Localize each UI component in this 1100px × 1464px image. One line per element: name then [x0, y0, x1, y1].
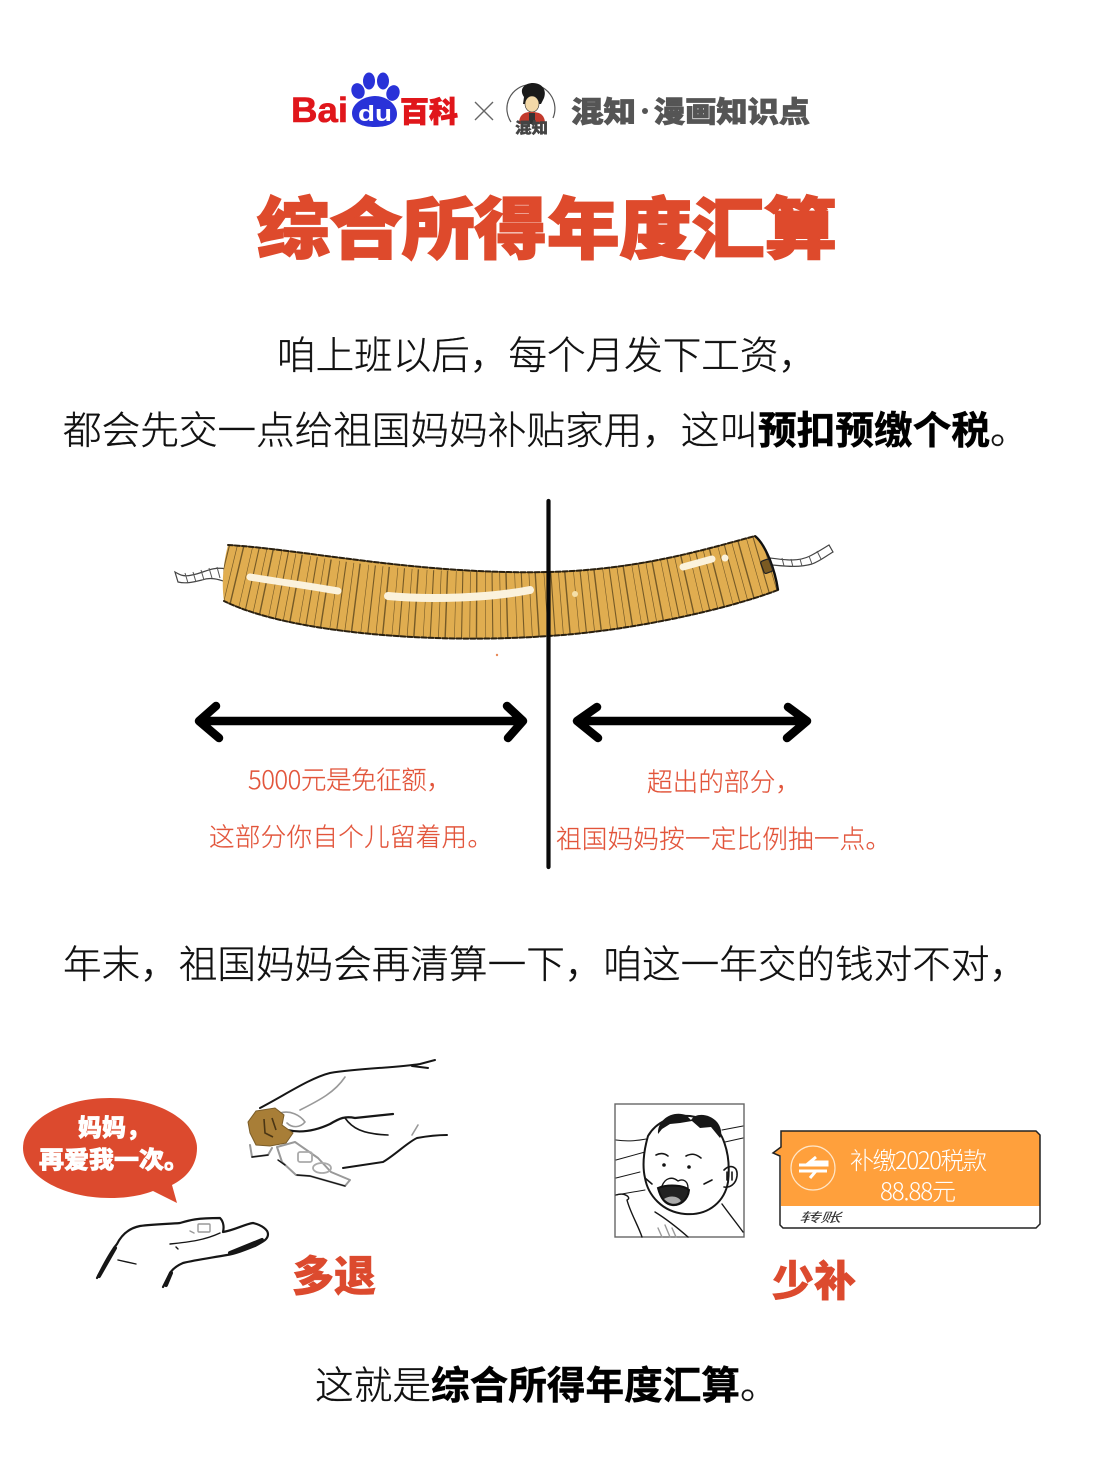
conclusion text: 这就是: [315, 1365, 431, 1408]
intro text: 预扣预缴个税: [758, 410, 990, 453]
coin ribs: [222, 559, 780, 606]
caption: tax-free amount: [209, 760, 493, 854]
coin highlights: [250, 556, 728, 598]
conclusion text: [315, 1365, 779, 1408]
illustration: receiving hand: [97, 1218, 268, 1287]
speech bubble: 再爱我一次。: [39, 1147, 189, 1174]
logo text: Hunzhi comics: 漫画知识点: [654, 96, 810, 129]
header logos: [291, 72, 810, 137]
logo text: Hunzhi comics: 混知: [571, 96, 636, 129]
icon: transfer arrows: [791, 1146, 835, 1190]
intro text: 都会先交一点给祖国妈妈补贴家用，这叫: [63, 410, 758, 453]
logo: Hunzhi avatar: 混知: [515, 119, 548, 137]
intro text: 咱上班以后，每个月发下工资，: [277, 335, 817, 378]
caption: exceeding amount: [556, 762, 891, 856]
divider line: [546, 501, 551, 867]
caption: tax-free amount: 这部分你自个儿留着用。: [209, 817, 493, 854]
caption: exceeding amount: 祖国妈妈按一定比例抽一点。: [556, 819, 891, 856]
illustration: crying baby: [615, 1104, 744, 1237]
title: 综合所得年度汇算: [257, 193, 837, 268]
logo: Baidu Baike: du: [358, 101, 392, 126]
year-end text: 年末，祖国妈妈会再清算一下，咱这一年交的钱对不对，: [63, 944, 1028, 987]
rope right: [770, 545, 833, 567]
coin outline: [224, 536, 778, 639]
caption: tax-free amount: 5000元是免征额，: [248, 760, 452, 797]
tax payment card: 补缴2020税款: [850, 1141, 987, 1176]
logo: Hunzhi avatar: [507, 83, 555, 137]
arrow: taxable range: [577, 707, 807, 738]
speech bubble: 妈妈，: [78, 1114, 150, 1142]
tax payment card: 88.88元: [880, 1172, 956, 1207]
rope left: [175, 567, 226, 583]
intro text: [63, 335, 1029, 453]
conclusion text: 。: [740, 1365, 779, 1408]
logo: Baidu Baike: 百科: [400, 96, 458, 129]
coin in fingers: [248, 1108, 293, 1146]
illustration: hand giving coin: [248, 1060, 447, 1186]
caption: exceeding amount: 超出的部分，: [647, 762, 801, 799]
arrow: tax-free range: [199, 706, 523, 738]
logo: Baidu Baike: [291, 72, 458, 130]
tax payment card: [773, 1131, 1040, 1228]
logo text: Hunzhi comics: [571, 96, 810, 129]
label: pay less: 少补: [772, 1258, 856, 1305]
multiply sign: [475, 102, 493, 120]
tax payment card: 转账: [799, 1210, 844, 1225]
logo: Baidu Baike: Bai: [291, 91, 348, 130]
speech bubble: [23, 1098, 197, 1203]
illustration: string of coins: [175, 536, 833, 656]
label: refund more: 多退: [292, 1253, 376, 1300]
conclusion text: 综合所得年度汇算: [431, 1365, 740, 1408]
intro text: 。: [990, 410, 1029, 453]
coin stack body: [223, 536, 778, 639]
